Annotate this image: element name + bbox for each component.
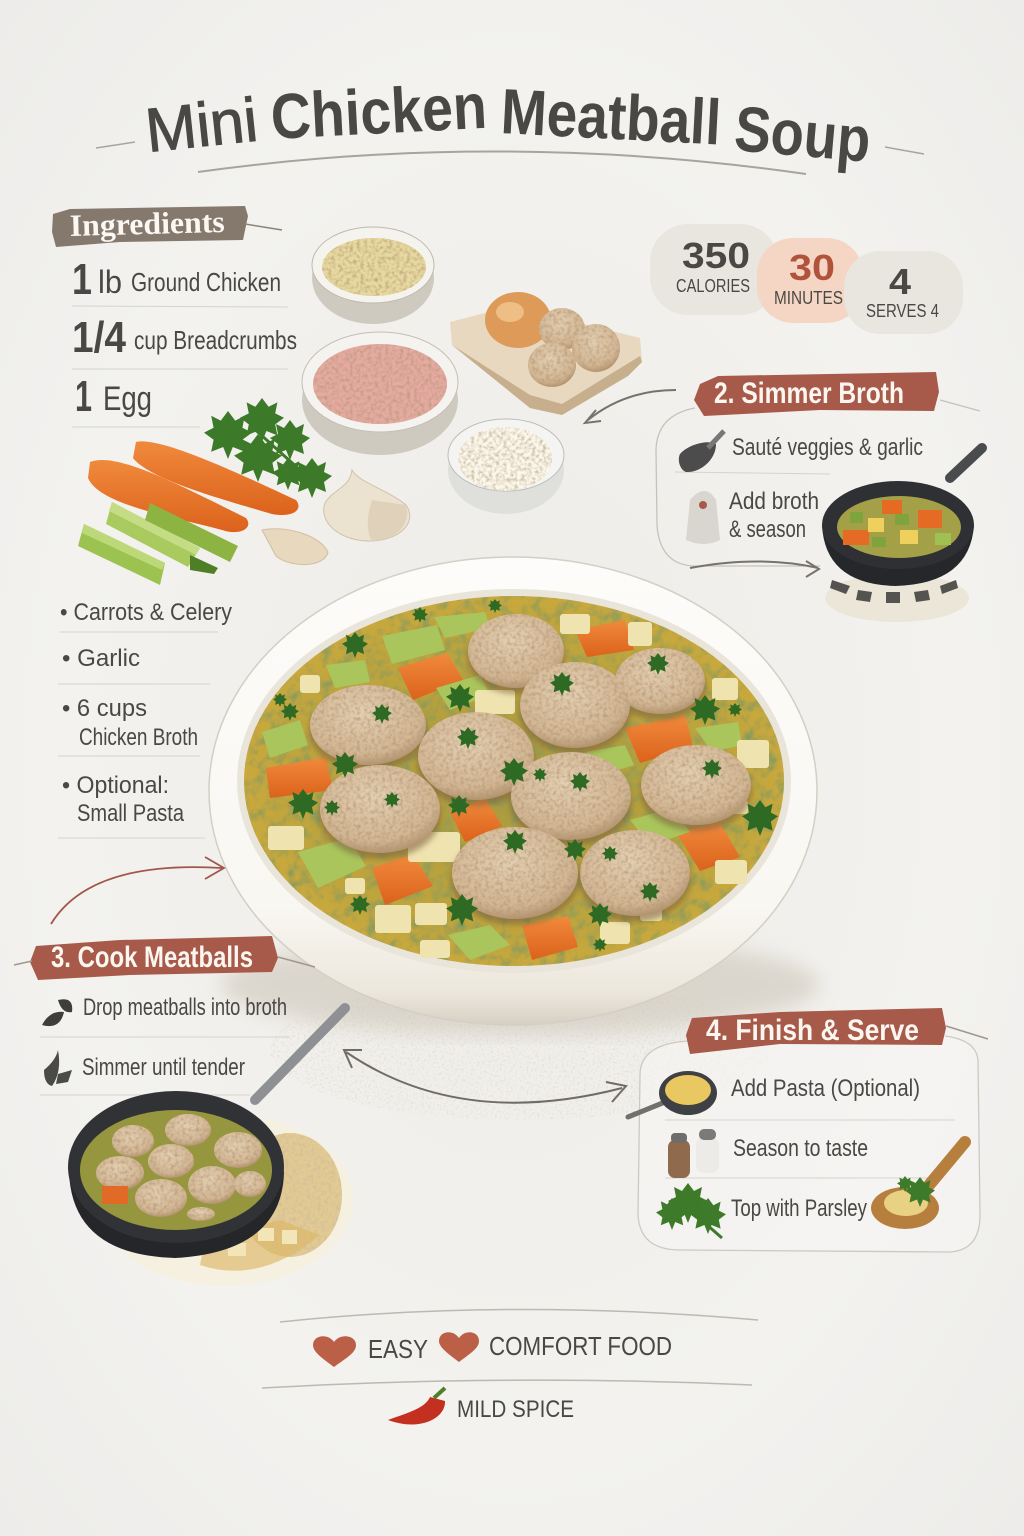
footer — [262, 1309, 758, 1424]
icon: parsley — [204, 398, 332, 498]
ingredient list: top — [72, 255, 297, 427]
step text — [665, 1075, 955, 1222]
ingredient list: bottom: • Garlic — [62, 645, 140, 672]
bowl of soup — [209, 557, 820, 1120]
stats: calories, minutes, serves: MINUTES — [774, 288, 843, 308]
bowl inner wall — [237, 589, 791, 973]
step text — [40, 994, 290, 1095]
ingredient list: bottom: Chicken Broth — [79, 724, 198, 751]
table speckle — [270, 980, 770, 1120]
icon: rice glass bowl — [448, 419, 564, 514]
panel outline — [656, 400, 980, 566]
stats: calories, minutes, serves: 350 — [682, 235, 750, 276]
bowl shadow — [220, 935, 820, 1035]
icon: wooden spoon — [871, 1142, 965, 1229]
heading banner — [686, 1008, 988, 1054]
stats: calories, minutes, serves: 30 — [789, 247, 835, 288]
parsley flecks — [273, 599, 778, 952]
arrow: to simmer — [585, 390, 676, 423]
meatballs — [309, 620, 752, 925]
step text: & season — [729, 516, 806, 543]
stats: calories, minutes, serves: SERVES 4 — [866, 301, 939, 321]
step text — [675, 434, 923, 543]
icon: ladle — [679, 431, 724, 472]
icon: pan with soup — [822, 448, 982, 622]
arrow: double-headed — [344, 1050, 626, 1103]
footer: EASY — [368, 1334, 428, 1364]
heading: ingredients: Ingredients — [69, 204, 225, 243]
icon: carrots — [78, 441, 299, 585]
step text: Season to taste — [733, 1135, 868, 1162]
title: Chicken — [269, 70, 488, 153]
step text: Sauté veggies & garlic — [732, 434, 923, 461]
icon: parsley — [656, 1183, 726, 1238]
ingredient list: top: Ground Chicken — [131, 267, 281, 297]
ingredient list: top: Egg — [103, 380, 152, 418]
ingredient list: bottom: • Carrots & Celery — [60, 599, 232, 626]
panel: simmer broth — [656, 372, 982, 622]
icon: drops — [42, 999, 72, 1026]
panel outline — [638, 1036, 980, 1252]
panel: cook meatballs — [14, 936, 353, 1286]
potato cubes — [268, 614, 769, 958]
soup surface — [244, 596, 784, 966]
title: Soup — [732, 92, 874, 176]
icon: garlic — [262, 470, 410, 565]
footer: MILD SPICE — [457, 1396, 574, 1423]
stats: calories, minutes, serves — [650, 224, 963, 334]
celery — [262, 612, 742, 960]
step text: Simmer until tender — [82, 1054, 245, 1081]
icon: pasta pan — [628, 1071, 717, 1117]
icon: simmer — [44, 1050, 72, 1086]
icon: heart — [439, 1332, 479, 1362]
stats: calories, minutes, serves: CALORIES — [676, 276, 750, 296]
ingredient list: top: lb — [98, 264, 122, 300]
icon: chili — [388, 1388, 445, 1424]
step text: Add broth — [729, 488, 819, 515]
icon: breadcrumbs bowl — [312, 227, 434, 324]
ingredient list: top: 1 — [75, 372, 92, 421]
heading: ingredients — [52, 204, 282, 247]
icon: heart — [313, 1336, 356, 1367]
heading banner — [14, 936, 315, 980]
heading banner: 3. Cook Meatballs — [51, 941, 253, 974]
panel: finish and serve — [628, 1008, 988, 1252]
step text: Top with Parsley — [731, 1195, 867, 1222]
icon: salt and pepper — [668, 1129, 719, 1178]
step text: Drop meatballs into broth — [83, 994, 287, 1021]
arrow — [690, 561, 819, 577]
heading banner — [694, 372, 939, 416]
ingredient list: bottom: Small Pasta — [77, 800, 185, 827]
ingredient list: bottom: • 6 cups — [62, 695, 147, 722]
title: Mini — [142, 86, 261, 166]
icon: ground chicken bowl — [302, 332, 458, 455]
icon: pan with meatballs — [68, 1008, 353, 1286]
ingredient list: top: 1/4 — [72, 313, 126, 362]
icon: salt shaker — [686, 491, 720, 544]
ingredient list: bottom: • Optional: — [62, 772, 169, 799]
icon: egg on board — [450, 292, 642, 415]
heading banner: 4. Finish & Serve — [706, 1014, 919, 1047]
arrow: to bowl — [51, 857, 224, 924]
ingredient list: top: 1 — [72, 255, 92, 304]
title — [96, 70, 924, 176]
bowl body — [209, 557, 817, 1025]
ingredient list: top: cup Breadcrumbs — [134, 325, 297, 355]
heading banner: 2. Simmer Broth — [714, 377, 904, 410]
ingredient list: bottom — [58, 599, 232, 838]
carrots — [266, 620, 740, 960]
footer: COMFORT FOOD — [489, 1331, 672, 1361]
title: Meatball — [499, 75, 723, 158]
stats: calories, minutes, serves: 4 — [889, 261, 911, 302]
step text: Add Pasta (Optional) — [731, 1075, 920, 1102]
